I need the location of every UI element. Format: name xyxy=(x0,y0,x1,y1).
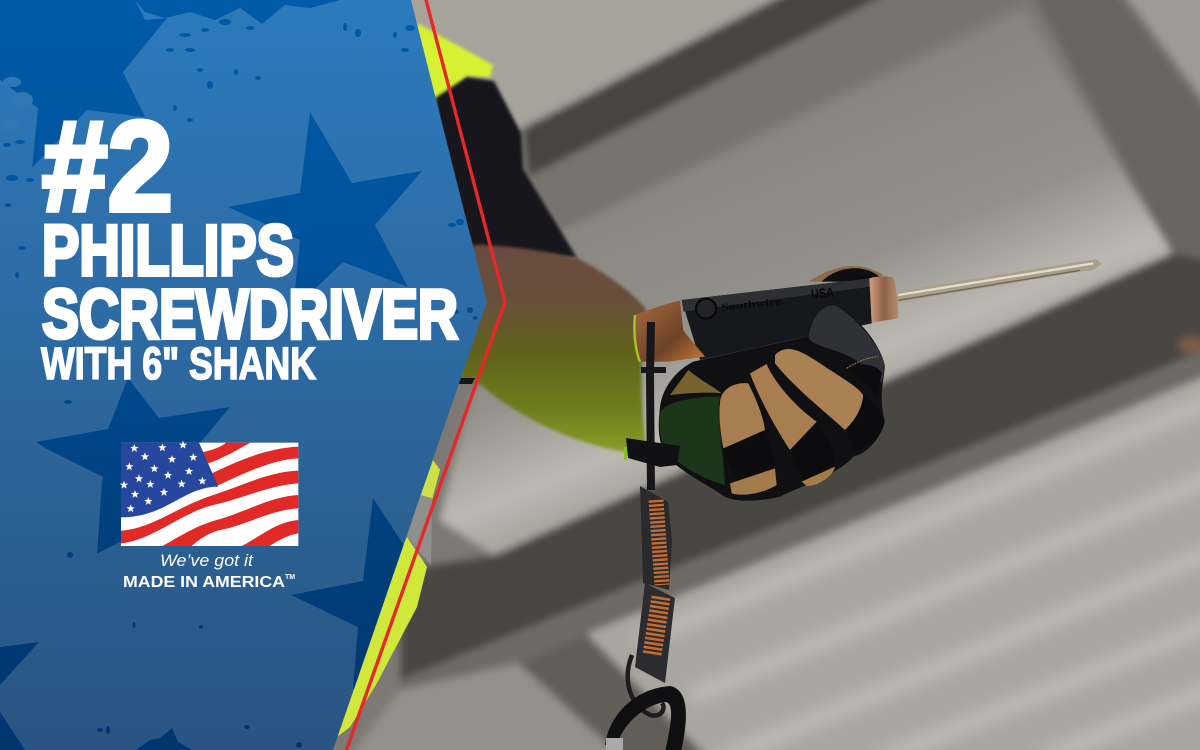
finger one xyxy=(719,383,777,495)
webbing strap lower xyxy=(635,583,675,683)
screwdriver handle xyxy=(634,276,898,362)
tether cord xyxy=(641,322,666,490)
finger two xyxy=(750,364,835,486)
title: number: #2 xyxy=(42,96,173,238)
cord lock xyxy=(624,438,680,467)
background photo: blurred ceiling structure xyxy=(330,0,1200,750)
sleeve hem below arm xyxy=(452,378,475,384)
lanyard with tether strap and carabiner xyxy=(605,322,686,750)
metal loop xyxy=(628,655,664,716)
brand logo xyxy=(696,299,716,319)
bottom-left star fragments xyxy=(0,642,39,685)
rear amber cap xyxy=(634,301,705,362)
panel star pattern xyxy=(0,0,477,750)
brand name: Southwire xyxy=(721,296,782,314)
top grunge band xyxy=(135,0,340,24)
trademark: TM xyxy=(285,574,295,581)
lower-centre star xyxy=(36,378,230,554)
front amber collar xyxy=(869,276,898,323)
USA mark: USA xyxy=(811,285,835,302)
high-vis vest shoulder xyxy=(405,23,493,103)
made in america: MADE IN AMERICA xyxy=(123,574,285,591)
forearm xyxy=(440,245,646,452)
thumb behind handle xyxy=(808,266,883,282)
lower-right star xyxy=(291,498,404,690)
ceiling panel corrugation stripes xyxy=(640,397,1200,750)
red outline chevron xyxy=(345,0,505,750)
carabiner xyxy=(605,686,686,750)
green reflected palm xyxy=(659,397,725,485)
finger four xyxy=(808,305,885,397)
icon: american flag xyxy=(120,441,298,546)
tagline: We’ve got it xyxy=(160,551,254,570)
title: phillips: PHILLIPS xyxy=(42,212,294,291)
bottom grunge xyxy=(136,728,192,750)
glove body xyxy=(659,307,885,501)
top-left star xyxy=(0,0,167,168)
grunge specks xyxy=(0,19,477,748)
palm patch xyxy=(670,370,722,395)
finger three xyxy=(775,349,884,450)
webbing strap upper xyxy=(640,486,672,590)
gloved hand holding screwdriver xyxy=(634,259,1102,501)
centre-right star xyxy=(228,112,422,310)
lower high-vis vest strip xyxy=(330,460,440,737)
blue title panel xyxy=(0,0,487,750)
screwdriver shank xyxy=(897,259,1102,302)
subtitle: WITH 6" SHANK xyxy=(41,338,316,389)
black sleeve xyxy=(435,77,577,258)
title: screwdriver: SCREWDRIVER xyxy=(42,275,458,353)
cap lime edge xyxy=(634,315,640,362)
